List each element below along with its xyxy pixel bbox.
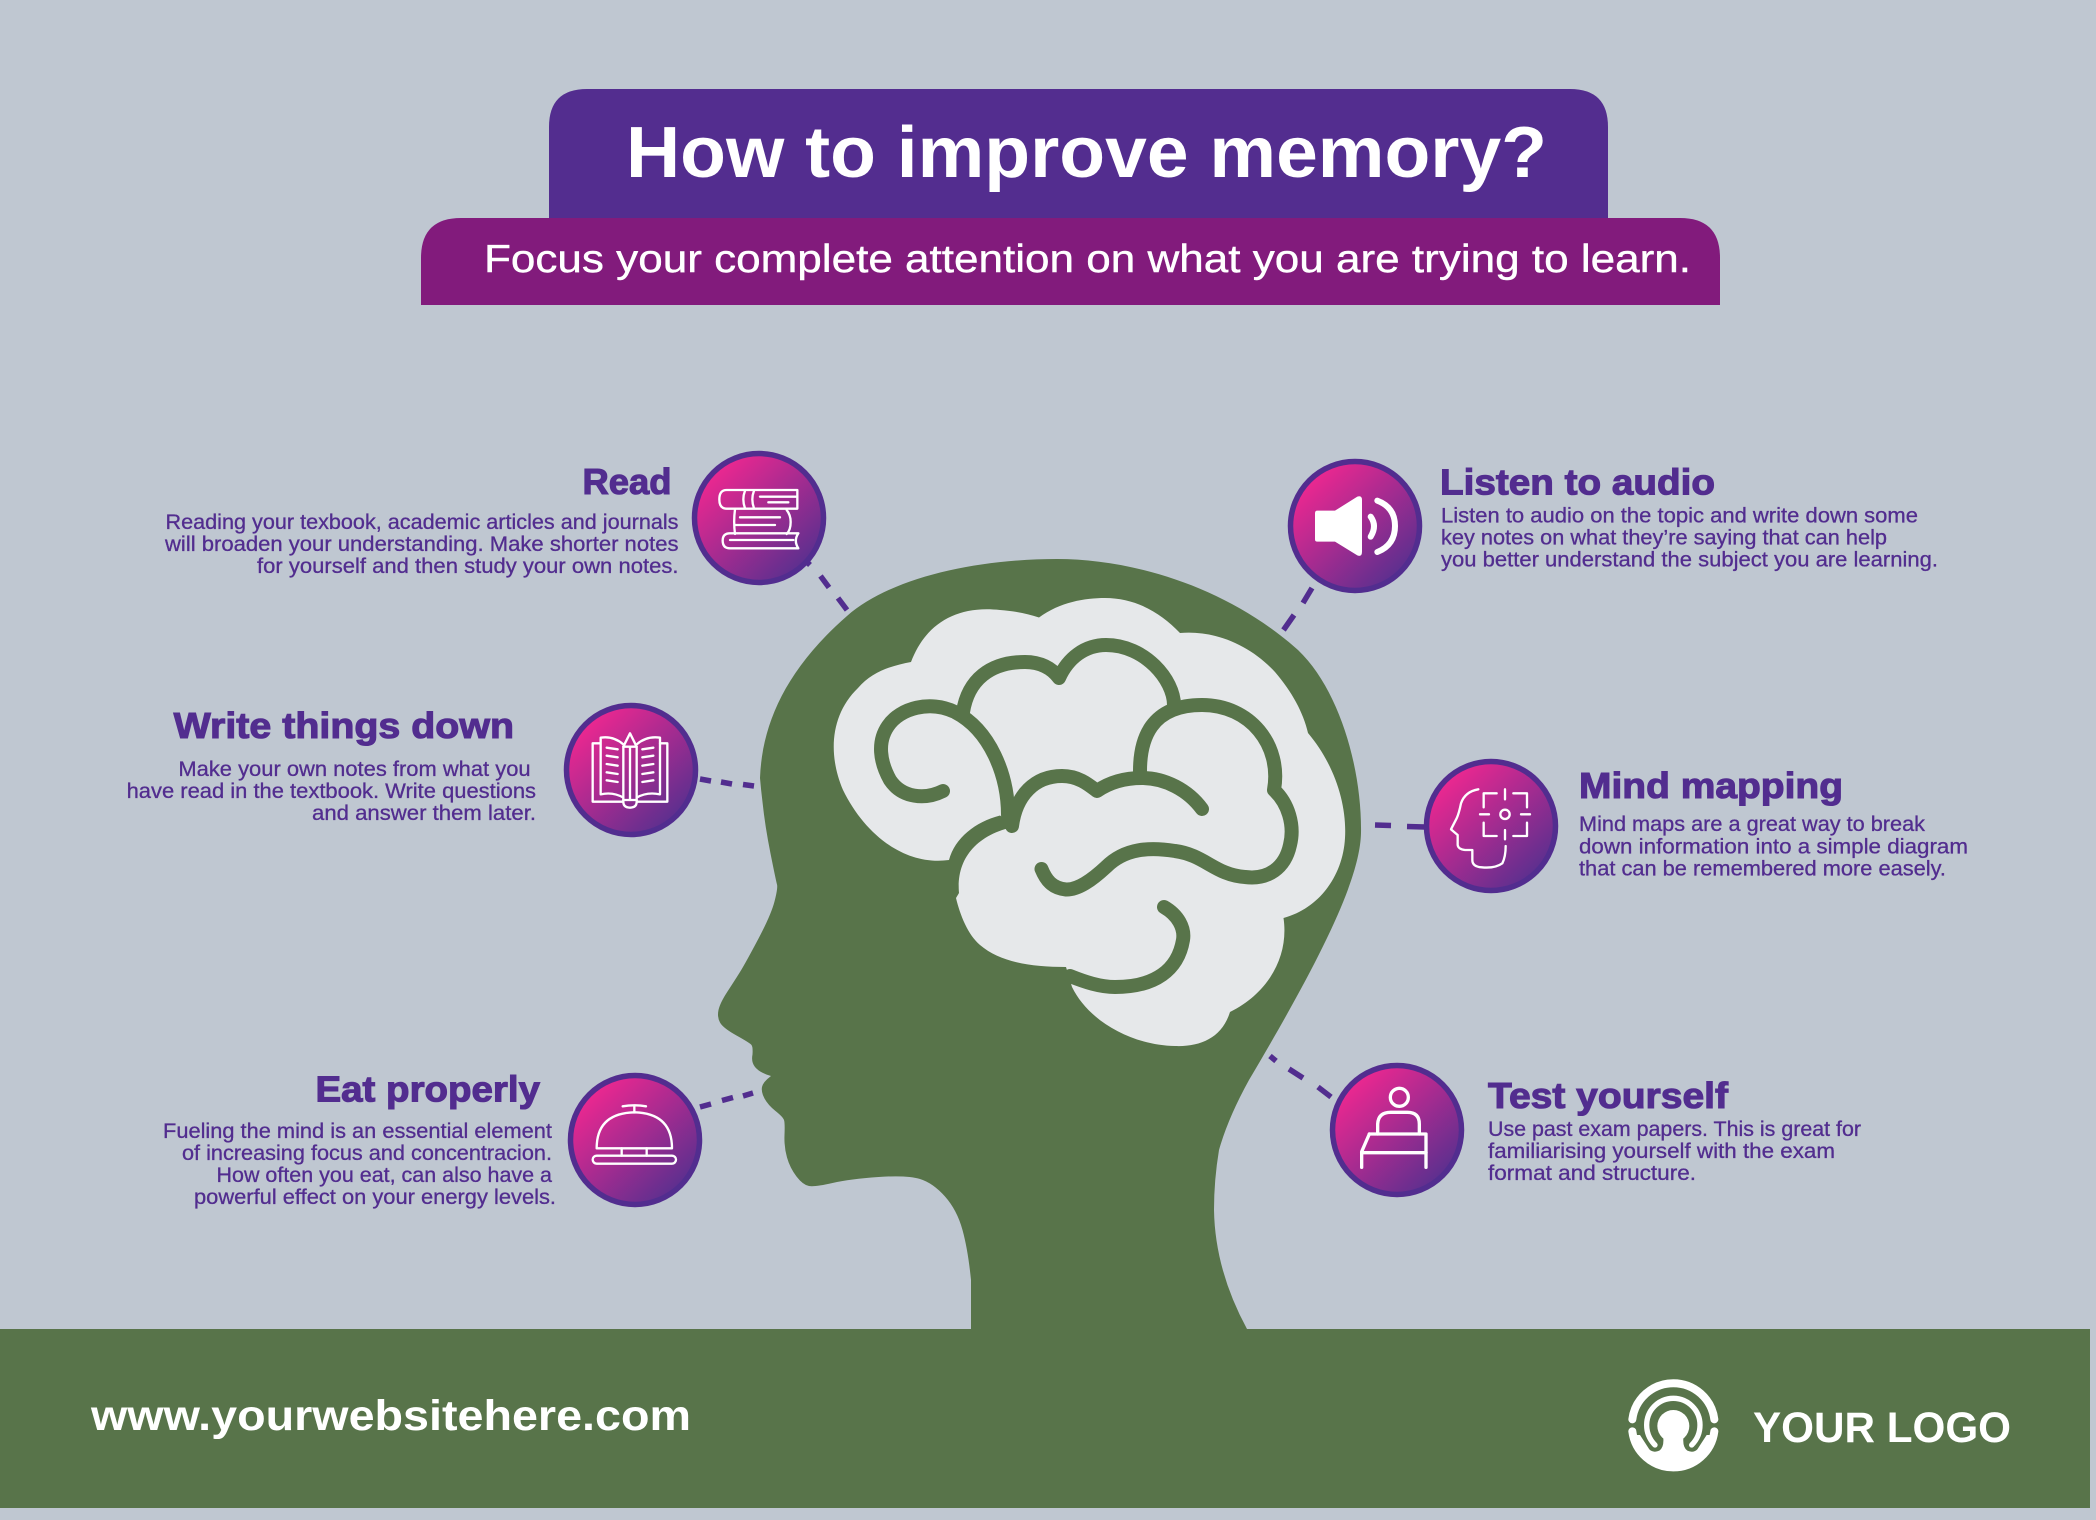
icon: head with focus target [1426, 762, 1556, 890]
dashed connector: mind mapping [1375, 825, 1425, 827]
text: test yourself: Test yourself [1488, 1075, 1729, 1116]
icon: service bell [570, 1076, 700, 1204]
icon: speaker [1290, 462, 1420, 590]
logo text: YOUR LOGO [1753, 1404, 2011, 1452]
head silhouette [718, 559, 1361, 1335]
text: write things down: Write things down [174, 705, 514, 746]
text: mind mapping: Mind mapping [1579, 765, 1843, 806]
text: read: for yourself and then study your own notes. [257, 555, 678, 578]
text: mind mapping: Mind maps are a great way to break [1579, 813, 1926, 836]
text: listen to audio [1440, 462, 1938, 572]
text: read: will broaden your understanding. Make shorter notes [164, 533, 678, 556]
icon: logo mark [1632, 1383, 1714, 1471]
icon: books [694, 454, 824, 582]
text: eat properly: Fueling the mind is an essential element [163, 1120, 552, 1143]
text: read: Read [582, 461, 672, 502]
text: eat properly: of increasing focus and concentracion. [182, 1142, 552, 1165]
text: eat properly [163, 1068, 556, 1209]
text: listen to audio: Listen to audio on the topic and write down some [1441, 504, 1918, 528]
title: How to improve memory? [626, 113, 1547, 193]
text: write things down: Make your own notes from what you [178, 758, 531, 781]
text: mind mapping: that can be remembered more easely. [1579, 858, 1946, 880]
text: write things down [127, 705, 536, 825]
website url: www.yourwebsitehere.com [90, 1392, 691, 1440]
text: write things down: have read in the textbook. Write questions [127, 780, 536, 803]
icon: person at desk [1332, 1066, 1462, 1194]
subtitle: Focus your complete attention on what you are trying to learn. [484, 238, 1691, 281]
dashed connector: listen [1284, 588, 1312, 630]
text: write things down: and answer them later. [312, 802, 536, 825]
text: listen to audio: Listen to audio [1440, 462, 1715, 502]
text: eat properly: powerful effect on your energy levels. [194, 1186, 556, 1209]
text: eat properly: Eat properly [316, 1068, 540, 1110]
text: test yourself [1488, 1075, 1861, 1185]
text: test yourself: familiarising yourself with the exam [1488, 1140, 1835, 1163]
icon: book and pencil [566, 706, 696, 834]
text: mind mapping: down information into a simple diagram [1579, 836, 1968, 858]
text: eat properly: How often you eat, can also have a [216, 1164, 552, 1187]
dashed connector: write [700, 779, 754, 786]
text: read [164, 461, 678, 578]
brain [834, 598, 1345, 1046]
text: test yourself: format and structure. [1488, 1162, 1696, 1185]
dashed connector: eat [700, 1093, 753, 1107]
title banner [549, 89, 1608, 218]
text: read: Reading your texbook, academic articles and journals [166, 511, 678, 534]
dashed connector: read [807, 562, 847, 610]
dashed connector: test [1270, 1056, 1331, 1097]
text: test yourself: Use past exam papers. This is great for [1488, 1118, 1861, 1141]
text: listen to audio: key notes on what they’re saying that can help [1441, 526, 1887, 550]
subtitle banner [421, 218, 1720, 305]
footer band [0, 1329, 2090, 1508]
text: listen to audio: you better understand the subject you are learning. [1441, 548, 1938, 572]
text: mind mapping [1579, 765, 1968, 880]
